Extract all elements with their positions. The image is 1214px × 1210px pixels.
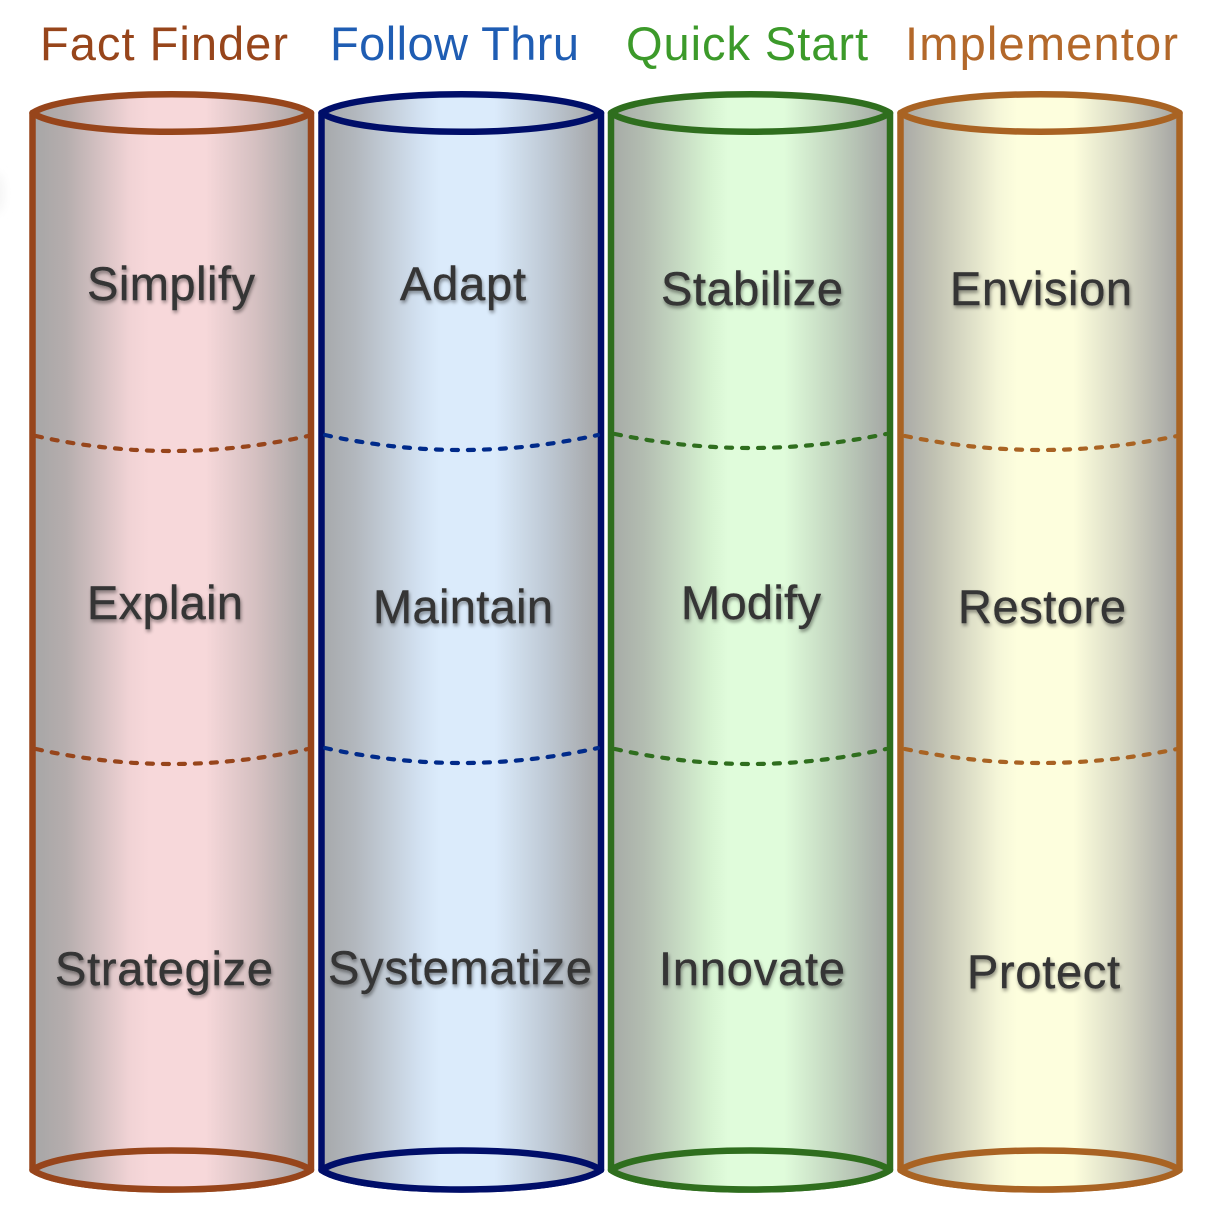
label: Adapt: Adapt (400, 257, 526, 310)
label: Systematize: Systematize (328, 941, 592, 994)
panel: Implementor column (900, 17, 1180, 1190)
label: Strategize: Strategize (55, 942, 273, 995)
heading: Quick Start: Quick Start (626, 17, 868, 70)
label: Explain: Explain (87, 576, 243, 629)
panel: Fact Finder column (32, 17, 311, 1190)
heading: Fact Finder: Fact Finder (40, 17, 288, 70)
cylinder: Implementor (900, 94, 1180, 1190)
label: Innovate: Innovate (659, 942, 845, 995)
panel: Follow Thru column (322, 17, 601, 1190)
cylinder: Quick Start (611, 94, 890, 1190)
label: Modify: Modify (681, 576, 822, 629)
heading: Implementor: Implementor (905, 17, 1178, 70)
label: Envision: Envision (950, 262, 1132, 315)
label: Maintain: Maintain (373, 580, 553, 633)
label: Stabilize: Stabilize (661, 262, 843, 315)
cylinder: Follow Thru (322, 94, 601, 1190)
label: Protect: Protect (967, 945, 1120, 998)
faint smudge at left edge (0, 173, 3, 213)
label: Simplify: Simplify (87, 257, 256, 310)
panel: Quick Start column (611, 17, 890, 1190)
heading: Follow Thru: Follow Thru (330, 17, 579, 70)
label: Restore: Restore (958, 580, 1126, 633)
cylinder: Fact Finder (32, 94, 311, 1190)
